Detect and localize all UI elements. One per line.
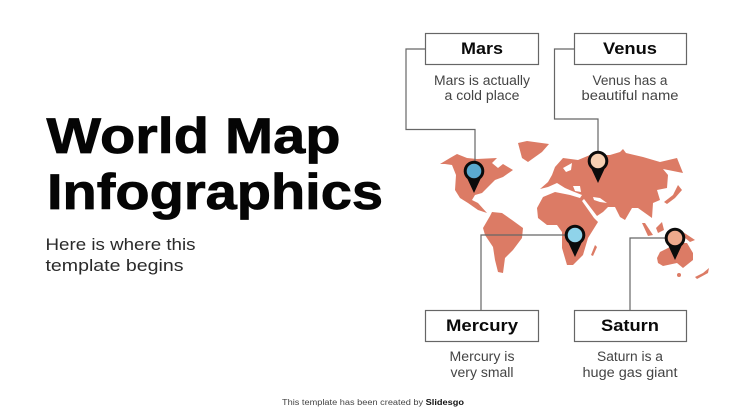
label: mars: a cold place [444,88,520,103]
japan [664,185,682,204]
new zealand [695,268,709,279]
label: saturn: Saturn [601,316,659,335]
label: mars: Mars is actually [434,73,530,88]
label: saturn [574,310,686,380]
connector: saturn [630,238,666,310]
title [46,108,383,220]
title: World Map [46,108,340,164]
madagascar [591,245,597,256]
title: Infographics [47,164,383,220]
connector: venus [554,49,598,152]
south america [483,212,523,273]
label: saturn: huge gas giant [582,365,678,380]
north america [440,154,513,213]
world map [440,141,709,279]
label: saturn: Saturn is a [597,349,663,364]
label: venus [574,34,686,103]
subtitle: Here is where this [46,235,196,254]
label: mercury: Mercury [446,316,519,335]
pin: saturn [665,228,685,260]
label: venus: Venus [603,39,657,58]
eurasia and africa [537,149,683,265]
label: mercury: Mercury is [450,349,515,364]
greenland [518,141,549,162]
pin: mercury [565,225,585,257]
indonesia [642,223,653,236]
seas [563,163,607,203]
label: venus: beautiful name [582,88,678,103]
label: mercury [426,310,538,380]
label: mercury: very small [450,365,514,380]
pin: mars [464,161,484,193]
subtitle [46,235,196,275]
label: mars: Mars [461,39,503,58]
connector: mars [406,49,475,162]
subtitle: template begins [46,256,184,275]
new guinea [656,222,664,233]
pin: venus [588,151,608,183]
footer credit: This template has been created by Slidesgo [282,398,464,407]
label: venus: Venus has a [592,73,668,88]
connector: mercury [481,235,566,310]
label: mars [426,34,538,103]
australia [657,243,693,268]
